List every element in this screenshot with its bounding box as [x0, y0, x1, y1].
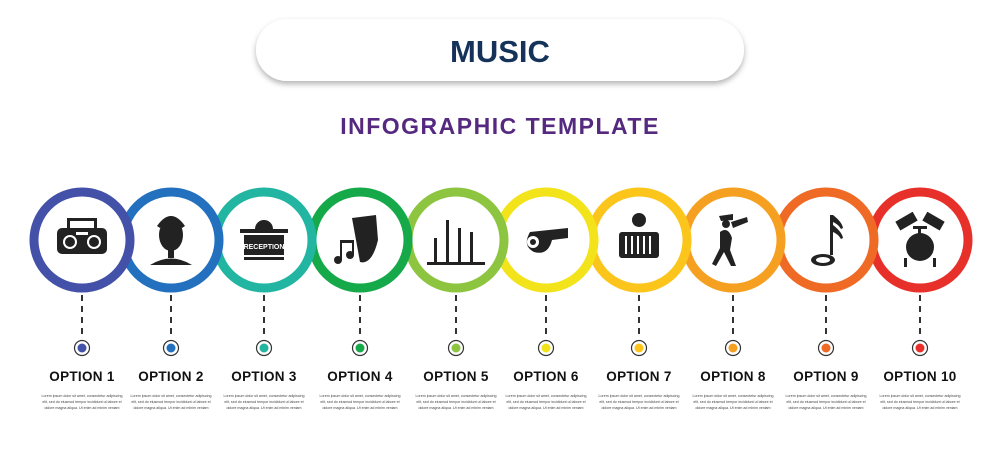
description texts: dolore magna aliqua. Ut enim ad minim veniam	[508, 406, 584, 410]
connectors	[82, 295, 920, 338]
title pill: MUSIC	[450, 34, 550, 69]
description texts: Lorem ipsum dolor sit amet, consectetur adipiscing	[506, 394, 586, 398]
icon: notes and mask	[334, 215, 378, 264]
description texts: dolore magna aliqua. Ut enim ad minim veniam	[601, 406, 677, 410]
description texts: elit, sed do eiusmod tempor incididunt ut labore et	[599, 400, 679, 404]
option dots	[74, 340, 928, 356]
icon: whistle	[527, 228, 568, 253]
description texts: elit, sed do eiusmod tempor incididunt ut labore et	[506, 400, 586, 404]
description texts: Lorem ipsum dolor sit amet, consectetur adipiscing	[131, 394, 211, 398]
option labels	[49, 369, 957, 384]
icon: person with headphones	[150, 216, 192, 265]
description texts: Lorem ipsum dolor sit amet, consectetur adipiscing	[416, 394, 496, 398]
subtitle: INFOGRAPHIC TEMPLATE	[340, 113, 660, 139]
option labels: OPTION 10	[883, 369, 957, 384]
option labels: OPTION 3	[231, 369, 297, 384]
description texts: dolore magna aliqua. Ut enim ad minim veniam	[133, 406, 209, 410]
description texts: elit, sed do eiusmod tempor incididunt ut labore et	[416, 400, 496, 404]
icon: boombox	[57, 218, 107, 254]
description texts: elit, sed do eiusmod tempor incididunt ut labore et	[786, 400, 866, 404]
description texts: elit, sed do eiusmod tempor incididunt ut labore et	[224, 400, 304, 404]
icon: eighth note	[811, 215, 843, 266]
description texts: Lorem ipsum dolor sit amet, consectetur adipiscing	[880, 394, 960, 398]
title pill	[256, 19, 744, 81]
description texts: dolore magna aliqua. Ut enim ad minim veniam	[882, 406, 958, 410]
description texts: dolore magna aliqua. Ut enim ad minim veniam	[44, 406, 120, 410]
description texts	[42, 394, 960, 410]
icon: reception desk	[240, 220, 288, 260]
icon: reception desk: RECEPTION	[244, 244, 284, 251]
option labels: OPTION 9	[793, 369, 859, 384]
option labels: OPTION 2	[138, 369, 204, 384]
icon: equalizer bars	[427, 220, 485, 265]
option labels: OPTION 6	[513, 369, 579, 384]
ring chain	[34, 192, 968, 288]
option labels: OPTION 7	[606, 369, 672, 384]
description texts: dolore magna aliqua. Ut enim ad minim veniam	[226, 406, 302, 410]
description texts: dolore magna aliqua. Ut enim ad minim veniam	[322, 406, 398, 410]
description texts: dolore magna aliqua. Ut enim ad minim veniam	[695, 406, 771, 410]
description texts: Lorem ipsum dolor sit amet, consectetur adipiscing	[786, 394, 866, 398]
description texts: elit, sed do eiusmod tempor incididunt ut labore et	[42, 400, 122, 404]
description texts: dolore magna aliqua. Ut enim ad minim veniam	[788, 406, 864, 410]
icon: accordion	[619, 213, 659, 258]
description texts: elit, sed do eiusmod tempor incididunt ut labore et	[320, 400, 400, 404]
description texts: Lorem ipsum dolor sit amet, consectetur adipiscing	[224, 394, 304, 398]
description texts: Lorem ipsum dolor sit amet, consectetur adipiscing	[693, 394, 773, 398]
option labels: OPTION 8	[700, 369, 766, 384]
option labels: OPTION 1	[49, 369, 115, 384]
description texts: elit, sed do eiusmod tempor incididunt ut labore et	[880, 400, 960, 404]
description texts: Lorem ipsum dolor sit amet, consectetur adipiscing	[42, 394, 122, 398]
icon: drum set	[895, 212, 945, 267]
option labels: OPTION 4	[327, 369, 393, 384]
description texts: elit, sed do eiusmod tempor incididunt ut labore et	[131, 400, 211, 404]
icon: trumpet player	[712, 214, 748, 266]
option labels: OPTION 5	[423, 369, 489, 384]
description texts: Lorem ipsum dolor sit amet, consectetur adipiscing	[320, 394, 400, 398]
description texts: dolore magna aliqua. Ut enim ad minim veniam	[418, 406, 494, 410]
description texts: Lorem ipsum dolor sit amet, consectetur adipiscing	[599, 394, 679, 398]
description texts: elit, sed do eiusmod tempor incididunt ut labore et	[693, 400, 773, 404]
